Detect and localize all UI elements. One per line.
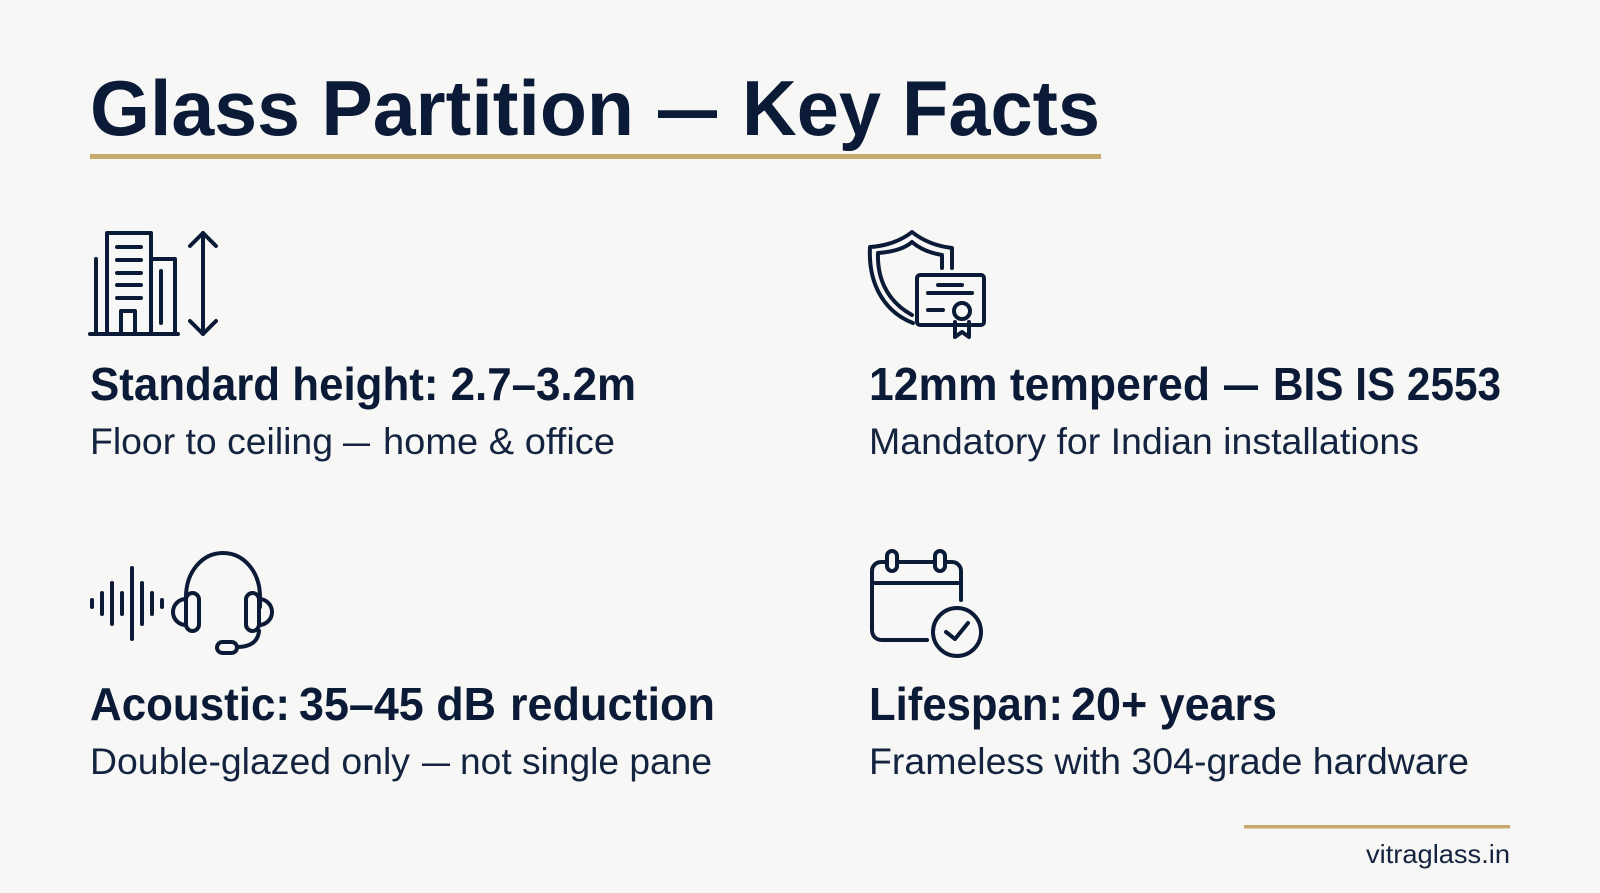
footer website: vitraglass.in	[1366, 839, 1510, 869]
title underline	[90, 154, 1101, 159]
panel: lifespan	[869, 551, 1469, 782]
icon: calendar with check	[872, 551, 981, 656]
heading: Standard height: 2.7–3.2m	[90, 358, 636, 410]
title: Key Facts	[742, 64, 1100, 152]
panel: tempered glass	[869, 232, 1501, 462]
description: —	[343, 421, 370, 462]
heading: 35–45 dB	[299, 678, 496, 730]
description: Frameless with 304-grade hardware	[869, 741, 1469, 782]
panel: acoustic	[90, 553, 715, 782]
description: Floor to ceiling	[90, 421, 333, 462]
heading: Acoustic:	[90, 678, 290, 730]
description: —	[422, 741, 450, 782]
title: —	[658, 64, 717, 152]
icon: sound wave with headset	[92, 553, 272, 653]
description: home & office	[383, 421, 615, 462]
heading	[90, 678, 715, 730]
heading: —	[1224, 358, 1258, 410]
icon: shield with certificate	[870, 232, 984, 337]
icon: building with height arrow	[90, 233, 216, 334]
heading: 20+ years	[1071, 678, 1277, 730]
footer rule	[1244, 825, 1510, 828]
title: Glass Partition	[90, 64, 634, 152]
heading	[869, 358, 1501, 410]
description: Double-glazed only	[90, 741, 410, 782]
heading	[869, 678, 1277, 730]
heading: Lifespan:	[869, 678, 1063, 730]
heading: BIS IS 2553	[1273, 358, 1501, 410]
description: not single pane	[460, 741, 712, 782]
description	[90, 421, 615, 462]
description	[90, 741, 712, 782]
title	[90, 64, 1100, 152]
description: Mandatory for Indian installations	[869, 421, 1419, 462]
panel: standard height	[90, 233, 636, 462]
heading: reduction	[510, 678, 715, 730]
heading: 12mm tempered	[869, 358, 1210, 410]
